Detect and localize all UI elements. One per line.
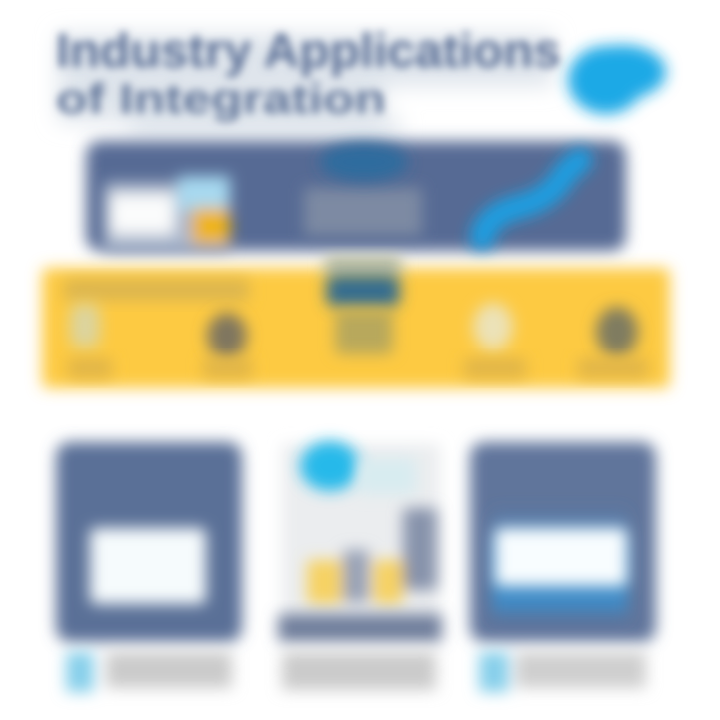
title: of Integration (56, 75, 386, 122)
panel: top banner (86, 141, 626, 252)
caption: right (479, 652, 646, 692)
bar chart (307, 508, 437, 604)
icon: left light (70, 304, 100, 348)
banner text block (304, 188, 422, 236)
icon: right dark (596, 307, 638, 357)
panel: yellow band (42, 256, 670, 388)
panel: middle card (278, 441, 442, 642)
window illustration (104, 176, 230, 252)
right card blue glow (492, 505, 628, 623)
centre stem (325, 256, 401, 276)
panel: left card (56, 442, 242, 642)
caption: middle (282, 652, 436, 690)
icon: right light (473, 303, 513, 351)
banner heading tab (320, 143, 408, 181)
title (56, 25, 561, 122)
icon: blue blob (300, 441, 360, 491)
pale blue tint (358, 458, 416, 494)
band captions (68, 358, 648, 378)
centre icon (335, 310, 393, 354)
centre badge (326, 275, 400, 307)
icon: left dark (207, 313, 247, 359)
chart arrow (482, 160, 580, 238)
band text strip (64, 279, 249, 301)
icon: cloud logo (568, 45, 666, 114)
title: Industry Applications (56, 25, 561, 78)
title haze (58, 34, 553, 136)
right card white box (495, 528, 627, 586)
middle card footer band (278, 614, 442, 642)
left card white box (90, 528, 206, 604)
panel: right card (470, 442, 656, 642)
caption: left (66, 652, 232, 692)
